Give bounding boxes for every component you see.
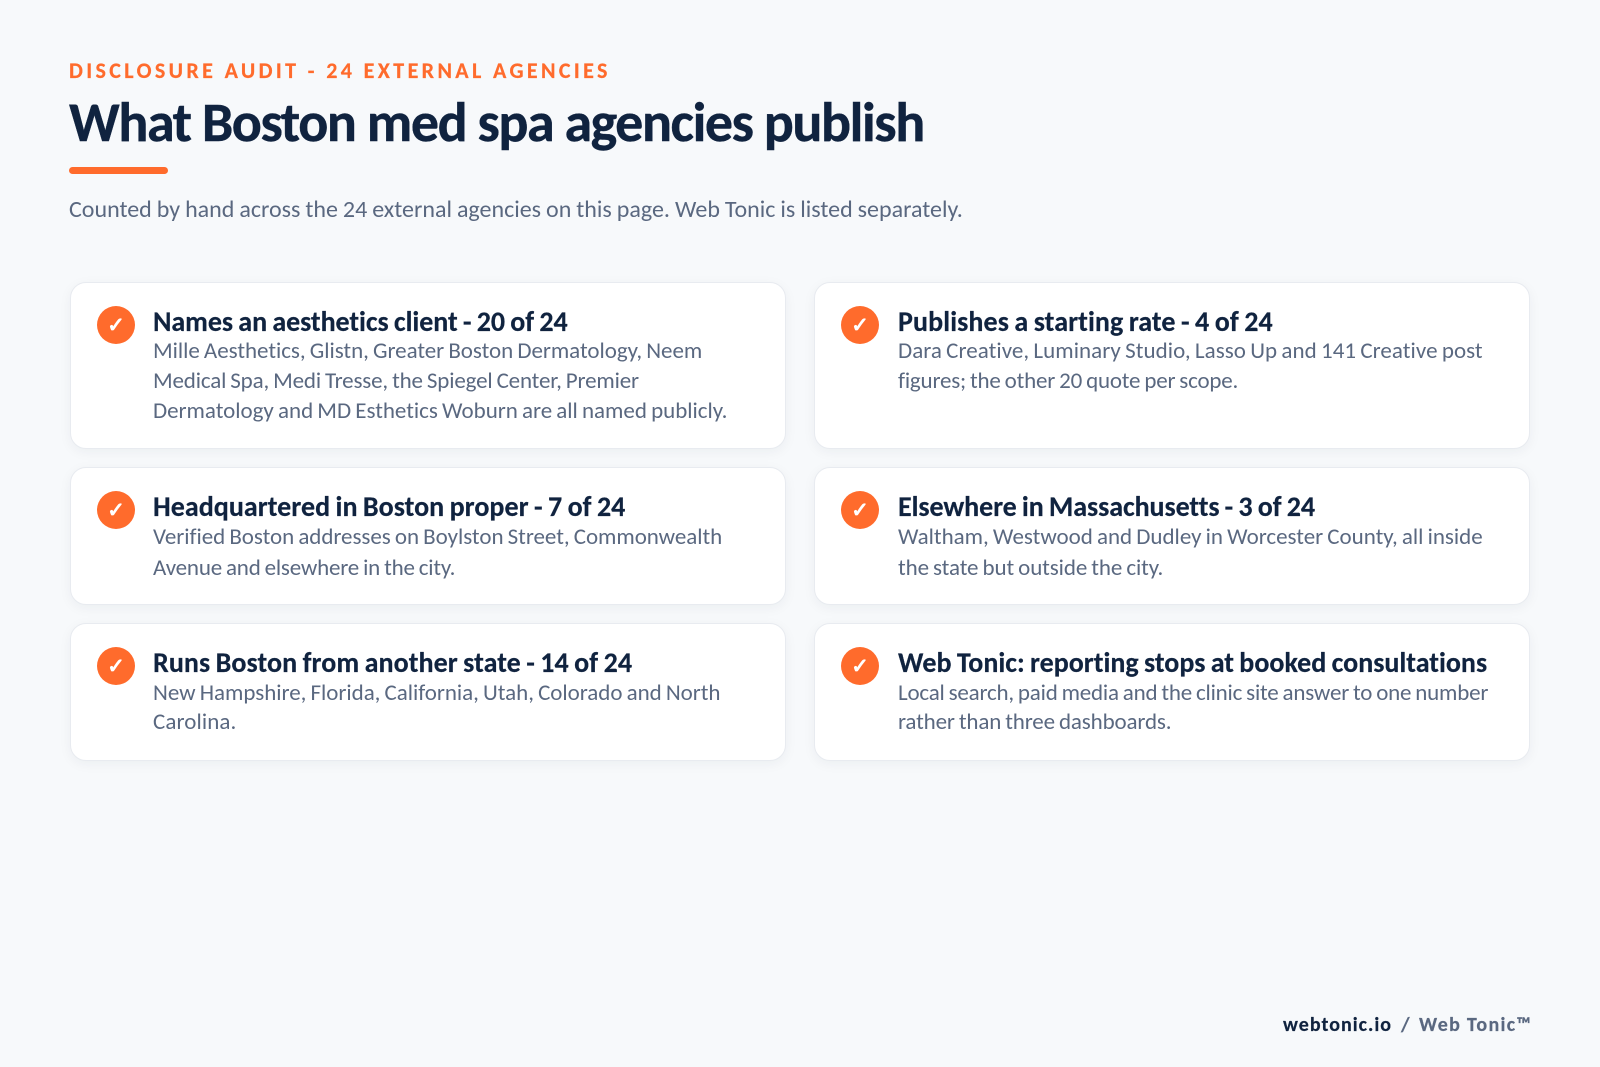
card text: rather than three dashboards. — [898, 708, 1171, 736]
icon: check — [97, 647, 135, 685]
panel: Web Tonic reporting — [814, 623, 1530, 761]
icon: check: ✓ — [107, 498, 125, 522]
icon: check: ✓ — [107, 654, 125, 678]
icon: check — [841, 647, 879, 685]
card text: Medical Spa, Medi Tresse, the Spiegel Center, Premier — [153, 367, 639, 395]
panel: publishes a starting rate — [814, 282, 1530, 449]
icon: check — [841, 306, 879, 344]
card text: Dermatology and MD Esthetics Woburn are all named publicly. — [153, 397, 727, 425]
footer: / — [1401, 1013, 1411, 1037]
icon: check — [841, 491, 879, 529]
card text — [153, 337, 727, 425]
card text — [153, 679, 720, 736]
card text: Mille Aesthetics, Glistn, Greater Boston Dermatology, Neem — [153, 337, 702, 365]
card text — [153, 523, 722, 582]
card heading: Publishes a starting rate - 4 of 24 — [898, 304, 1273, 339]
panel: headquartered in Boston proper — [70, 467, 786, 605]
icon: check: ✓ — [107, 313, 125, 337]
card text: Verified Boston addresses on Boylston Street, Commonwealth — [153, 523, 722, 551]
card text: Dara Creative, Luminary Studio, Lasso Up and 141 Creative post — [898, 337, 1483, 365]
card text — [898, 523, 1483, 582]
card text: Local search, paid media and the clinic site answer to one number — [898, 679, 1488, 707]
subtitle: Counted by hand across the 24 external agencies on this page. Web Tonic is listed separately. — [69, 195, 963, 224]
eyebrow: DISCLOSURE AUDIT - 24 EXTERNAL AGENCIES — [69, 57, 611, 84]
icon: check — [97, 491, 135, 529]
panel: names an aesthetics client — [70, 282, 786, 449]
card text: the state but outside the city. — [898, 554, 1163, 582]
icon: check — [97, 306, 135, 344]
panel: runs Boston from another state — [70, 623, 786, 761]
panel: elsewhere in Massachusetts — [814, 467, 1530, 605]
card text — [898, 679, 1488, 736]
card heading: Elsewhere in Massachusetts - 3 of 24 — [898, 489, 1315, 524]
card heading: Runs Boston from another state - 14 of 24 — [153, 645, 632, 680]
card text: figures; the other 20 quote per scope. — [898, 367, 1238, 395]
card heading: Headquartered in Boston proper - 7 of 24 — [153, 489, 625, 524]
footer — [1283, 1013, 1532, 1037]
card text: Waltham, Westwood and Dudley in Worcester County, all inside — [898, 523, 1483, 551]
icon: check: ✓ — [851, 498, 869, 522]
card text: Avenue and elsewhere in the city. — [153, 554, 455, 582]
card text: Carolina. — [153, 708, 236, 736]
footer: Web Tonic™ — [1419, 1013, 1532, 1037]
card heading: Web Tonic: reporting stops at booked consultations — [898, 645, 1487, 680]
icon: check: ✓ — [851, 654, 869, 678]
title underline — [69, 167, 168, 174]
footer: webtonic.io — [1283, 1013, 1392, 1037]
icon: check: ✓ — [851, 313, 869, 337]
title: What Boston med spa agencies publish — [69, 89, 924, 157]
card text: New Hampshire, Florida, California, Utah, Colorado and North — [153, 679, 720, 707]
card text — [898, 337, 1483, 395]
card heading: Names an aesthetics client - 20 of 24 — [153, 304, 568, 339]
